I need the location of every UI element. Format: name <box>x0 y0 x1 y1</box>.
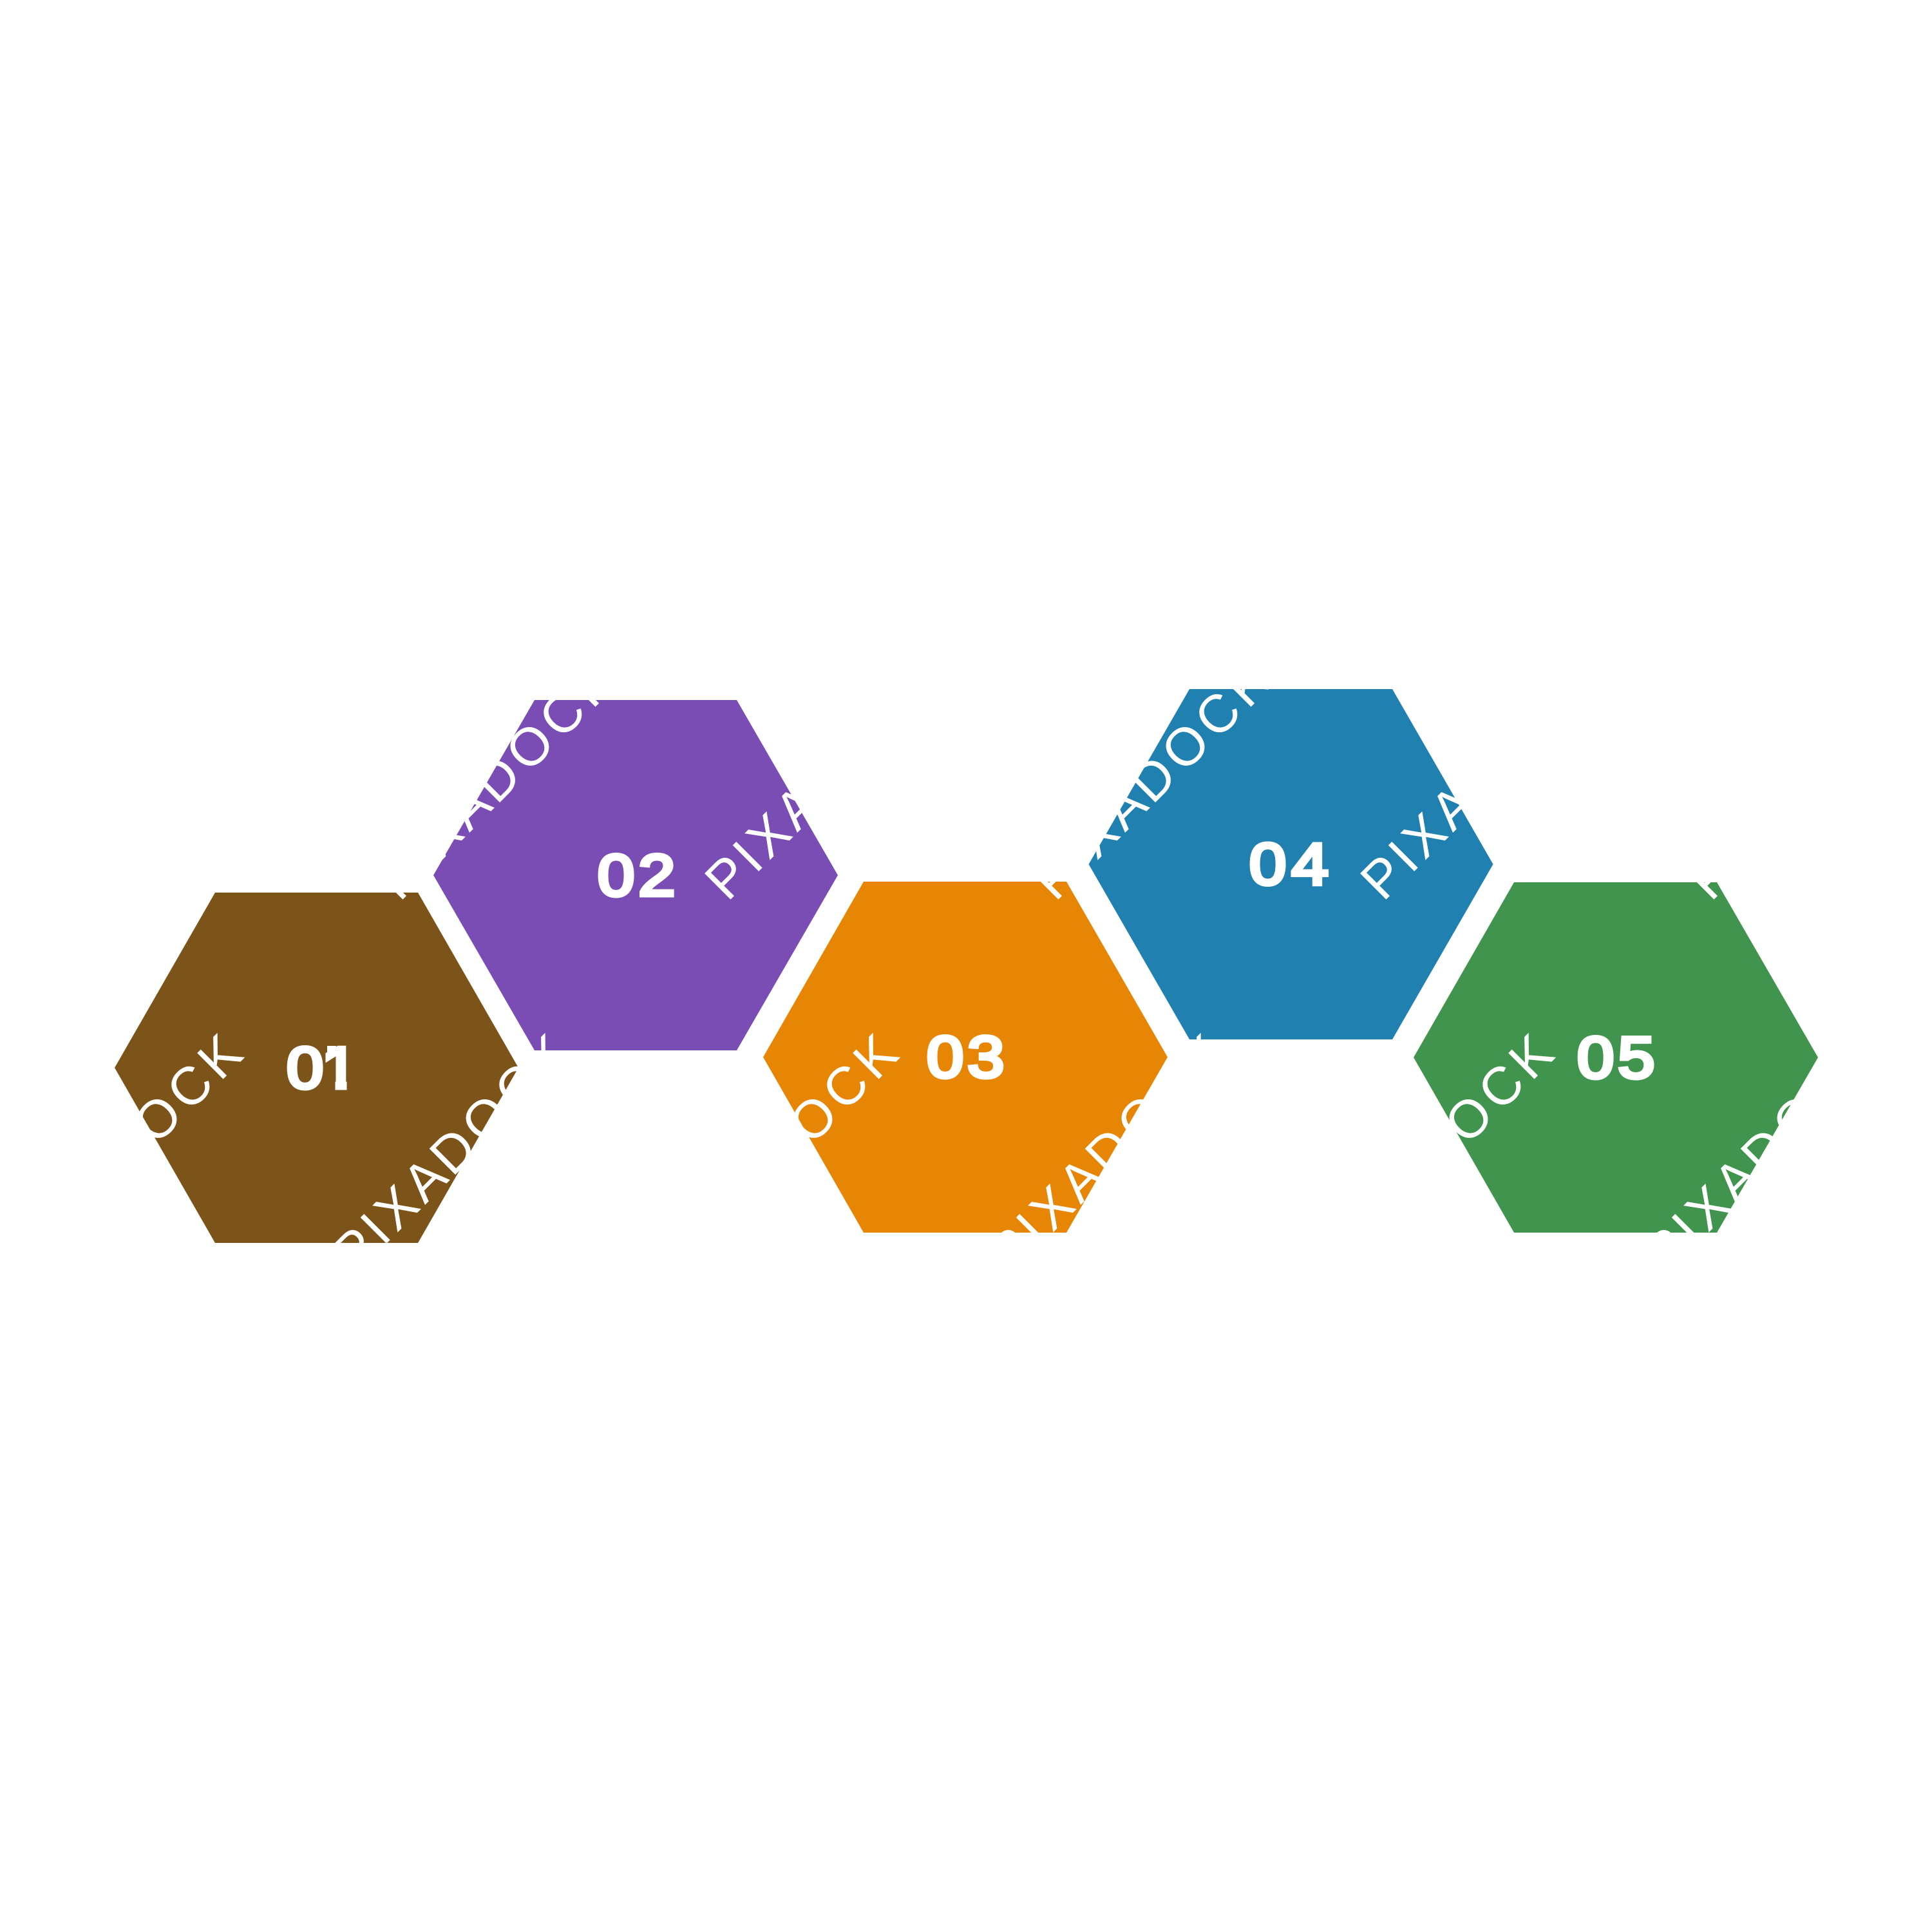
hexagon shape 05 <box>1414 882 1818 1233</box>
hexagon shape 02 <box>433 700 838 1050</box>
watermark text overlay: PIXADOCK <box>366 650 626 911</box>
number 01: 0 <box>287 1035 323 1101</box>
panel: hexagon 05 <box>1414 882 1818 1233</box>
panel: hexagon 01 <box>115 893 518 1243</box>
watermark text overlay: PIXADOCK <box>38 650 298 911</box>
watermark text overlay: PIXADOCK <box>321 1023 582 1283</box>
watermark text overlay: PIXADOCK <box>1349 650 1609 911</box>
watermark text overlay: PIXADOCK <box>1677 650 1932 911</box>
panel: hexagon 04 <box>1088 689 1493 1039</box>
hexagon shape 03 <box>763 882 1168 1233</box>
watermark text overlay: PIXADOCK <box>1305 1023 1565 1283</box>
watermark text overlay: PIXADOCK <box>0 1023 254 1283</box>
watermark text overlay: PIXADOCK <box>1021 650 1282 911</box>
hexagon shape 01 <box>115 893 518 1243</box>
number 03: 03 <box>927 1024 1004 1090</box>
watermark text overlay: PIXADOCK <box>977 1023 1237 1283</box>
panel: hexagon 03 <box>763 882 1168 1233</box>
watermark text overlay: PIXADOCK <box>649 1023 909 1283</box>
number 01: 1 <box>321 1035 358 1101</box>
watermark text overlay: PIXADOCK <box>1633 1023 1893 1283</box>
number 04: 04 <box>1249 831 1329 897</box>
panel: hexagon 02 <box>433 700 838 1050</box>
watermark text overlay <box>0 650 1932 1283</box>
hexagon shape 04 <box>1088 689 1493 1039</box>
number 05: 05 <box>1577 1025 1654 1090</box>
number 02: 02 <box>598 842 675 908</box>
watermark text overlay: PIXADOCK <box>694 650 954 911</box>
number 01 <box>287 1035 361 1101</box>
